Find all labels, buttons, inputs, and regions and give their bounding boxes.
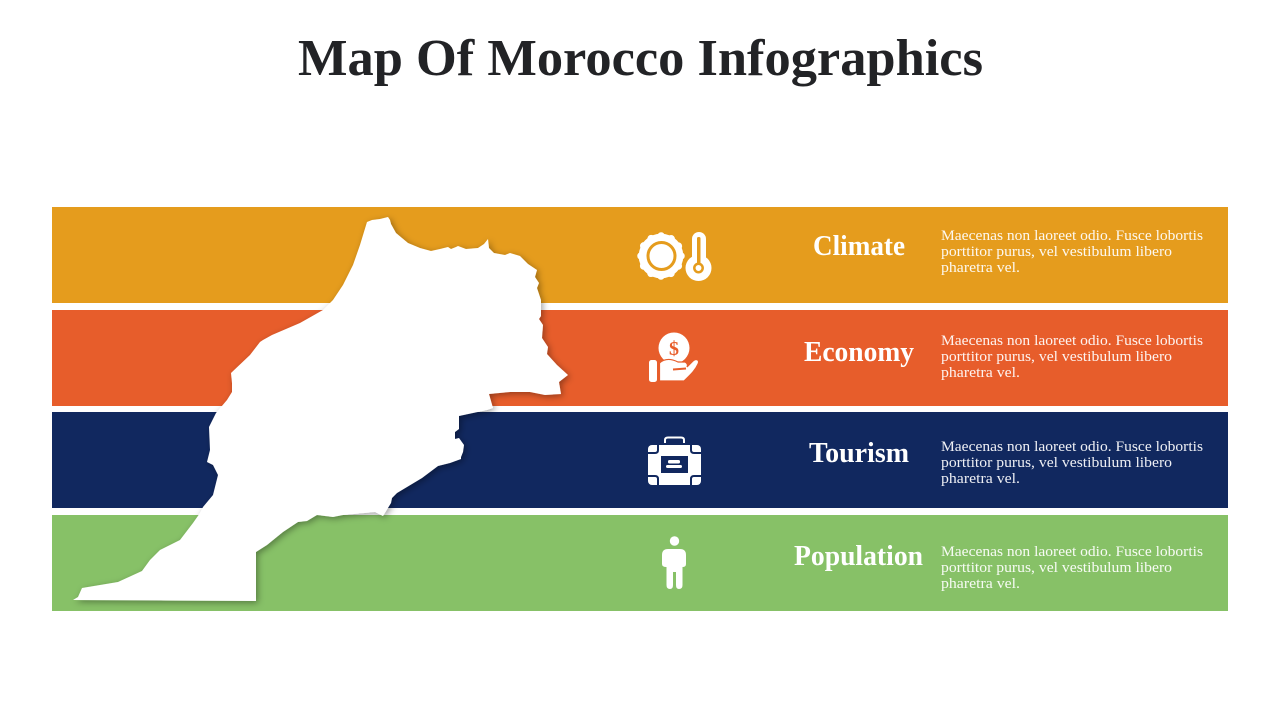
- panel: tourism: [52, 412, 1228, 508]
- panel: climate: [52, 207, 1228, 303]
- icon: hand holding coin: $: [669, 338, 679, 360]
- text: climate description: porttitor purus, vel vestibulum libero: [941, 244, 1172, 260]
- icon: hand holding coin: [649, 332, 699, 382]
- text: population description: porttitor purus, vel vestibulum libero: [941, 560, 1172, 576]
- panel: population: [52, 515, 1228, 611]
- heading: tourism: Tourism: [809, 438, 909, 469]
- text: climate description: pharetra vel.: [941, 260, 1020, 276]
- heading: economy: Economy: [804, 337, 914, 368]
- heading: climate: Climate: [813, 231, 905, 262]
- icon: person: [662, 536, 686, 589]
- text: economy description: [941, 333, 1203, 381]
- text: population description: pharetra vel.: [941, 576, 1020, 592]
- text: tourism description: pharetra vel.: [941, 471, 1020, 487]
- text: tourism description: porttitor purus, vel vestibulum libero: [941, 455, 1172, 471]
- text: economy description: porttitor purus, vel vestibulum libero: [941, 349, 1172, 365]
- text: tourism description: Maecenas non laoreet odio. Fusce lobortis: [941, 439, 1203, 455]
- text: tourism description: [941, 439, 1203, 487]
- text: economy description: Maecenas non laoreet odio. Fusce lobortis: [941, 333, 1203, 349]
- text: economy description: pharetra vel.: [941, 365, 1020, 381]
- map of Morocco: [73, 217, 568, 601]
- icon: sun and thermometer: [639, 232, 712, 281]
- icon: suitcase: [648, 438, 701, 485]
- title: Map Of Morocco Infographics: [298, 30, 983, 87]
- text: population description: Maecenas non laoreet odio. Fusce lobortis: [941, 544, 1203, 560]
- text: climate description: [941, 228, 1203, 276]
- heading: population: Population: [794, 541, 923, 572]
- panel: economy: [52, 310, 1228, 406]
- text: climate description: Maecenas non laoreet odio. Fusce lobortis: [941, 228, 1203, 244]
- text: population description: [941, 544, 1203, 592]
